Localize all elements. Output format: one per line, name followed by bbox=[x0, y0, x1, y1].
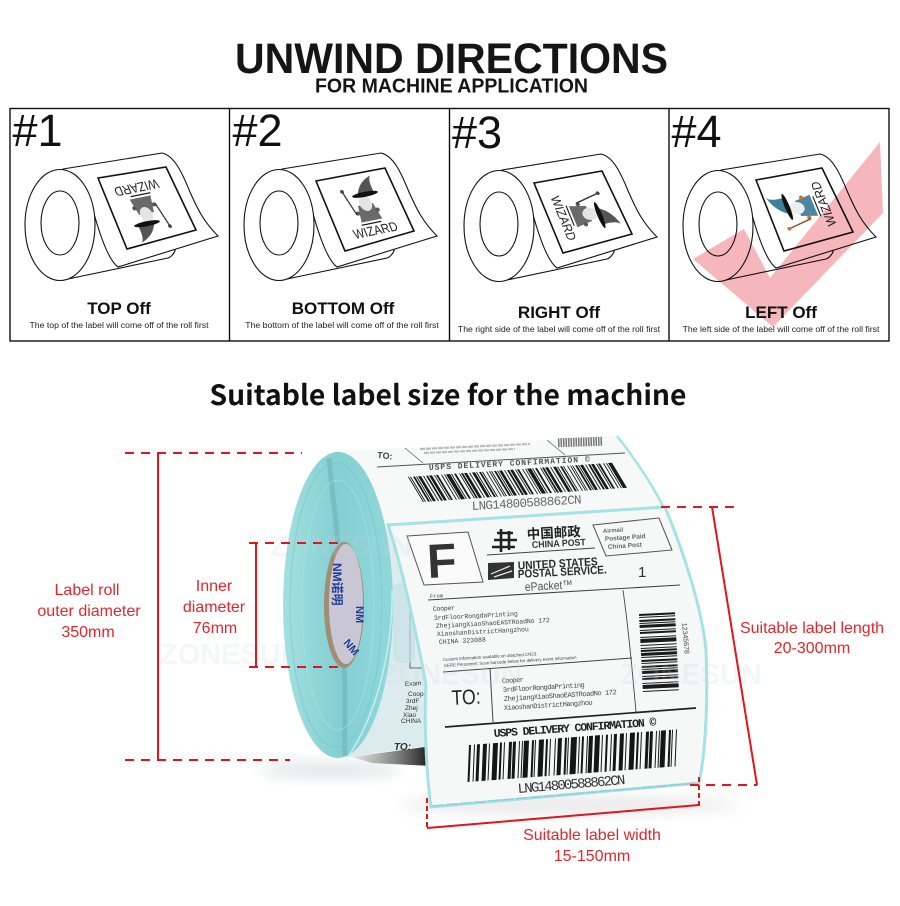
logo: China Post bbox=[487, 523, 595, 555]
label: label width: 15-150mm bbox=[554, 848, 630, 865]
roll outer label layer bbox=[335, 436, 665, 766]
upper label content: USPS DELIVERY CONFIRMATION © bbox=[429, 456, 590, 473]
logo: China Post: 中国邮政 bbox=[526, 523, 582, 542]
icon: wizard upright: WIZARD bbox=[351, 219, 400, 242]
to address: Cooper bbox=[502, 677, 524, 686]
F box bbox=[407, 532, 483, 589]
main label: 1 bbox=[638, 564, 646, 581]
F box: F bbox=[426, 535, 458, 589]
from address: XiaoshanDistrictHangzhou bbox=[437, 626, 529, 638]
main label bbox=[388, 507, 707, 807]
label: inner diameter: 76mm bbox=[193, 620, 237, 637]
upper label content: TO: bbox=[377, 450, 393, 461]
icon: wizard sideways left: WIZARD bbox=[807, 180, 840, 227]
from address: Custom Information available on attached CN23. bbox=[443, 651, 538, 662]
panel: #4 left off: The left side of the label will come off of the roll first bbox=[683, 324, 880, 334]
panel: #1 top off: The top of the label will come off of the roll first bbox=[30, 320, 209, 330]
roll core hole bbox=[324, 542, 365, 668]
panel: #3 right off: The right side of the label will come off of the roll first bbox=[458, 324, 661, 334]
dimension: label width bbox=[427, 777, 699, 865]
from address: Cooper bbox=[433, 605, 455, 613]
panel: #1 top off: #1 bbox=[12, 105, 63, 156]
title: UNWIND DIRECTIONS bbox=[235, 36, 668, 83]
to address bbox=[451, 677, 617, 713]
label: label width: Suitable label width bbox=[523, 827, 661, 844]
icon: wizard sideways right bbox=[547, 186, 623, 242]
from address: From bbox=[430, 592, 444, 600]
from address: CHINA 323088 bbox=[439, 637, 486, 646]
side barcode: 12345678 bbox=[680, 623, 690, 654]
icon: wizard upright bbox=[333, 174, 400, 242]
panel: #3 right off: RIGHT Off bbox=[518, 303, 600, 322]
icon: red check mark bbox=[693, 142, 883, 327]
panel: #2 bottom off: BOTTOM Off bbox=[292, 299, 395, 318]
roll outer label layer: 3rdF bbox=[406, 698, 419, 705]
label: outer diameter: outer diameter bbox=[37, 603, 141, 620]
icon: wizard sideways left bbox=[764, 180, 840, 236]
panel: #3 right off: #3 bbox=[452, 107, 502, 158]
bottom barcode: LNG14800588862CN bbox=[517, 773, 626, 798]
watermarks: ZONESUN bbox=[270, 531, 412, 563]
watermarks bbox=[160, 531, 762, 691]
label: label length: 20-300mm bbox=[774, 640, 850, 657]
from address: 3rdFloorRongdaPrinting bbox=[434, 611, 518, 622]
label: inner diameter bbox=[183, 578, 246, 637]
label: inner diameter: Inner bbox=[196, 578, 233, 595]
label grid lines bbox=[428, 585, 696, 727]
heading: suitable label size: Suitable label size for the machine bbox=[210, 374, 686, 414]
panel: unwind directions bbox=[10, 108, 889, 341]
roll core hole: NM bbox=[341, 637, 361, 658]
panel: #4 left off: LEFT Off bbox=[745, 303, 817, 322]
roll outer label layer: Coope bbox=[408, 691, 428, 698]
icon: wizard upside down bbox=[112, 176, 179, 244]
watermarks: ZONESUN bbox=[160, 639, 302, 671]
roll core hole: NM bbox=[353, 606, 365, 623]
icon: wizard sideways right: WIZARD bbox=[547, 195, 580, 242]
airmail box: China Post bbox=[608, 542, 643, 551]
panel: #2 bottom off bbox=[232, 105, 439, 330]
panel: #3 right off bbox=[452, 107, 661, 334]
label: inner diameter: diameter bbox=[183, 599, 246, 616]
logo: China Post: CHINA POST bbox=[532, 537, 586, 551]
photo: label roll bbox=[160, 436, 762, 814]
to address: ZhejiangXiaoShaoEASTRoadNo 172 bbox=[504, 689, 617, 704]
label: outer diameter: Label roll bbox=[55, 582, 119, 599]
roll outer label layer: Exam bbox=[405, 680, 422, 688]
watermarks: ZONESUN bbox=[380, 659, 522, 691]
logo: USPS: POSTAL SERVICE. bbox=[518, 564, 607, 581]
label: label width bbox=[523, 827, 661, 865]
to address: XiaoshanDistrictHangzhou bbox=[504, 700, 593, 713]
logo: USPS: UNITED STATES bbox=[518, 556, 598, 572]
roll outer label layer: CHINA bbox=[401, 718, 422, 725]
roll outer label layer: TO: bbox=[394, 742, 411, 753]
teal roll side bbox=[283, 452, 393, 758]
roll diagram 1 bbox=[25, 153, 218, 280]
panel: #4 left off bbox=[672, 106, 883, 334]
bottom barcode bbox=[468, 717, 676, 798]
from address bbox=[430, 592, 577, 668]
dimension: inner diameter bbox=[183, 543, 345, 667]
panel: #1 top off bbox=[12, 105, 218, 330]
to address: 3rdFloorRongdaPrinting bbox=[503, 682, 585, 695]
roll outer label layer: Xiao bbox=[403, 712, 416, 719]
logo: USPS bbox=[488, 556, 607, 594]
airmail box bbox=[593, 518, 672, 556]
icon: wizard upside down: WIZARD bbox=[112, 176, 161, 199]
roll outer label layer: Zhej bbox=[405, 705, 418, 712]
from address: SERE Personnel: Scan barcode below for delivery event information bbox=[444, 655, 577, 668]
roll diagram 4 bbox=[683, 154, 876, 282]
label: outer diameter: 350mm bbox=[61, 624, 115, 641]
dimension: label length bbox=[661, 507, 884, 785]
panel: #2 bottom off: The bottom of the label will come off of the roll first bbox=[245, 320, 439, 330]
airmail box: Postage Paid bbox=[605, 533, 646, 543]
panel: #2 bottom off: #2 bbox=[232, 105, 283, 156]
label: label length bbox=[740, 620, 884, 657]
panel: #1 top off: TOP Off bbox=[87, 299, 151, 318]
label: label length: Suitable label length bbox=[740, 620, 884, 637]
side barcode bbox=[657, 613, 690, 691]
panel: #4 left off: #4 bbox=[672, 106, 722, 157]
upper label content bbox=[377, 440, 625, 514]
subtitle: FOR MACHINE APPLICATION bbox=[315, 76, 588, 98]
bottom barcode: USPS DELIVERY CONFIRMATION © bbox=[493, 717, 657, 741]
from address: ZhejiangXiaoShaoEASTRoadNo 172 bbox=[436, 617, 550, 630]
roll diagram 2 bbox=[244, 153, 437, 280]
watermarks: ZONESUN bbox=[620, 659, 762, 691]
label: outer diameter bbox=[37, 582, 141, 641]
roll core hole: NM诺明 bbox=[330, 563, 345, 606]
logo: USPS: ePacket™ bbox=[524, 578, 573, 594]
dimension: outer diameter bbox=[37, 453, 302, 760]
to address: TO: bbox=[451, 686, 481, 710]
upper label content: LNG14800588862CN bbox=[471, 493, 582, 514]
airmail box: Airmail bbox=[603, 528, 624, 535]
roll diagram 3 bbox=[464, 154, 657, 282]
